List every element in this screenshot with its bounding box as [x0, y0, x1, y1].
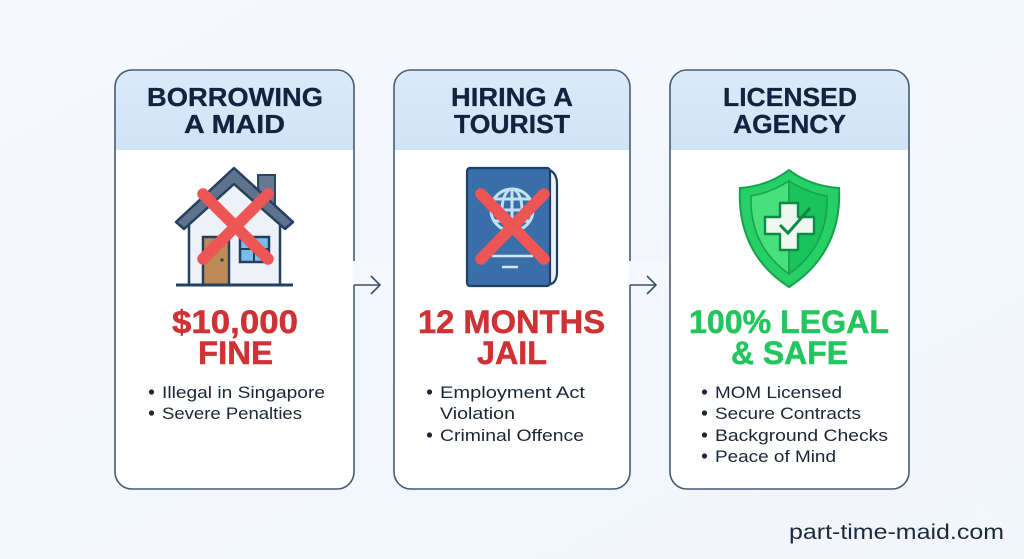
infographic canvas — [114, 69, 1002, 544]
heading: hiring a tourist: TOURIST — [454, 109, 570, 139]
bullet list: agency — [702, 383, 888, 466]
claim: 100% legal and safe: & SAFE — [731, 335, 848, 371]
bullet list: tourist: Violation — [440, 404, 515, 423]
penalty: $10,000 fine: FINE — [198, 335, 273, 371]
heading: borrowing a maid — [147, 82, 323, 139]
heading: hiring a tourist — [451, 82, 573, 139]
bullet list: tourist: Employment Act — [440, 383, 585, 402]
bullet list: borrowing — [149, 383, 325, 423]
penalty: $10,000 fine — [172, 304, 298, 371]
penalty: 12 months jail: 12 MONTHS — [418, 304, 605, 340]
panel: borrowing a maid — [115, 70, 354, 489]
claim: 100% legal and safe: 100% LEGAL — [689, 304, 889, 340]
heading: licensed agency — [723, 82, 857, 139]
penalty: $10,000 fine: $10,000 — [172, 304, 298, 340]
bullet list: agency: Background Checks — [715, 426, 888, 445]
watermark: website: part-time-maid.com — [789, 521, 1004, 544]
bullet list: agency: Secure Contracts — [715, 404, 861, 423]
bullet list: agency: MOM Licensed — [715, 383, 842, 402]
penalty: 12 months jail — [418, 304, 605, 371]
bullet list: borrowing: Illegal in Singapore — [162, 383, 325, 402]
icon: crossed-out house — [176, 168, 293, 285]
heading: licensed agency: AGENCY — [733, 109, 846, 139]
bullet list: agency: Peace of Mind — [715, 447, 836, 466]
heading: licensed agency: LICENSED — [723, 82, 857, 112]
heading: borrowing a maid: A MAID — [184, 109, 285, 139]
bullet list: tourist: Criminal Offence — [440, 426, 584, 445]
bullet list: tourist — [427, 383, 585, 445]
icon: green shield with cross and check — [740, 170, 839, 287]
penalty: 12 months jail: JAIL — [477, 335, 547, 371]
heading: borrowing a maid: BORROWING — [147, 82, 323, 112]
panel: hiring a tourist — [394, 70, 630, 489]
heading: hiring a tourist: HIRING A — [451, 82, 573, 112]
panel: licensed agency — [670, 70, 909, 489]
icon: crossed-out passport — [467, 168, 557, 286]
bullet list: borrowing: Severe Penalties — [162, 404, 302, 423]
arrow: first to second panel — [352, 261, 393, 294]
arrow: second to third panel — [628, 261, 669, 294]
claim: 100% legal and safe — [689, 304, 889, 371]
